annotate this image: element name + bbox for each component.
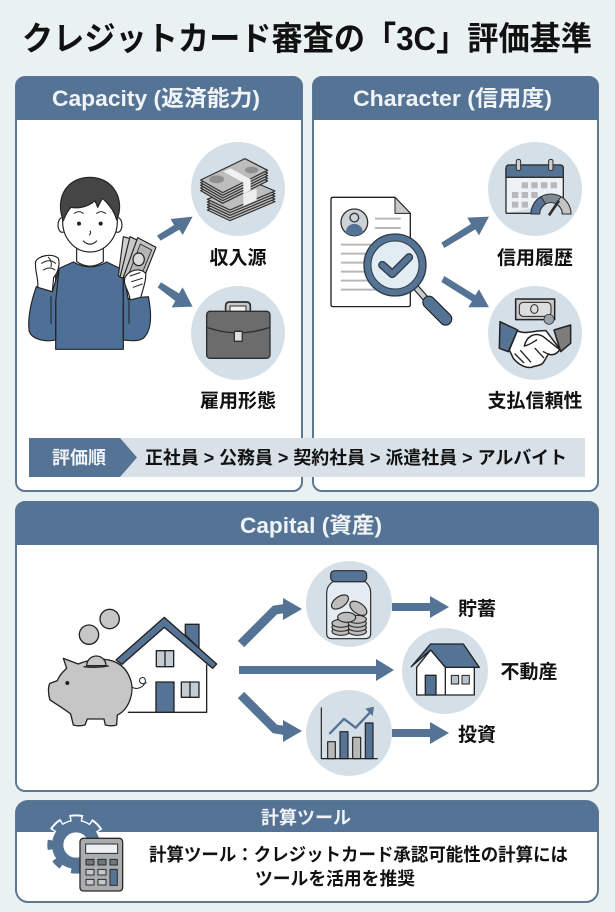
arrow: to employment [158,282,193,307]
arrow: to income [157,217,193,241]
label: payment reliability: 支払信頼性 [487,390,583,412]
title: クレジットカード審査の「3C」評価基準 [22,20,592,57]
arrow: to savings [241,598,302,644]
badge: evaluation order [29,438,137,477]
text: tool recommendation: ツールを活用を推奨 [255,869,415,889]
label: savings: 貯蓄 [458,598,496,620]
icon: calendar and gauge [488,142,582,236]
icon: growth chart [306,690,392,776]
heading: capital: Capital (資産) [240,513,382,538]
icon: gear and calculator [51,820,123,891]
label: employment type: 雇用形態 [200,389,276,412]
arrow: investment label [392,722,449,744]
icon: piggy bank and house [48,609,217,726]
ranking strip [29,438,585,477]
icon: coin jar [306,561,392,647]
label: investment: 投資 [458,724,496,746]
heading: capacity: Capacity (返済能力) [52,86,260,111]
icon: briefcase [191,286,285,380]
icon: person holding cash [29,177,156,349]
label: income source: 収入源 [209,247,267,269]
arrow: to payment reliability [441,276,489,307]
icon: house [402,628,488,714]
panel: capital [16,502,598,791]
text: tool recommendation [149,844,568,889]
panel: calculation tool [16,801,598,902]
arrow: savings label [392,596,449,618]
panel: character [313,77,598,491]
label: real estate: 不動産 [500,661,558,683]
panel: capacity [16,77,302,491]
heading: calculation tool: 計算ツール [261,807,351,828]
icon: handshake and bill [488,286,582,380]
heading: character: Character (信用度) [353,86,552,111]
icon: cash stacks [191,142,285,236]
arrow: to real estate [239,659,394,681]
arrow: to credit history [441,217,489,248]
label: credit history: 信用履歴 [497,247,573,269]
arrow: to investment [241,695,302,742]
text: ranking: 正社員 > 公務員 > 契約社員 > 派遣社員 > アルバイト [145,448,567,468]
label: evaluation order: 評価順 [52,448,106,468]
text: tool recommendation: 計算ツール：クレジットカード承認可能性の計算には [149,844,568,865]
icon: document and magnifier [331,197,446,319]
